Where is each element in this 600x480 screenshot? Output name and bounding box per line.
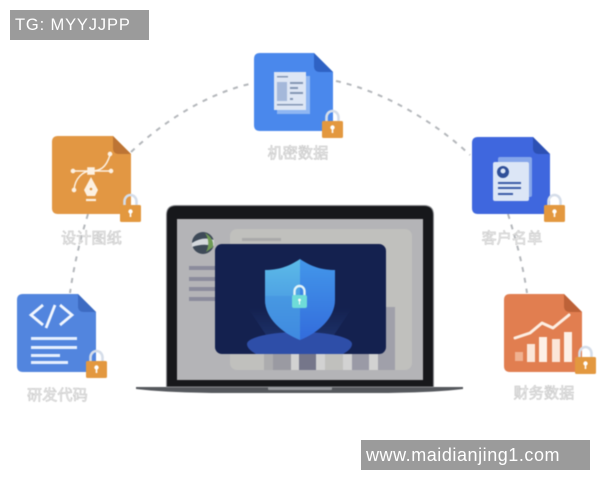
document: design drawings — [52, 136, 141, 222]
laptop — [136, 206, 463, 393]
document: R&D code — [17, 294, 107, 378]
platform — [247, 332, 352, 354]
watermark: website — [361, 440, 590, 470]
laptop base — [136, 387, 463, 393]
label: confidential data: 机密数据 — [268, 145, 328, 162]
sidebar lines — [189, 266, 219, 301]
shield — [265, 259, 335, 340]
text lines — [31, 337, 77, 364]
watermark: website: www.maidianjing1.com — [366, 445, 560, 465]
icon: pen tool — [71, 152, 113, 200]
security panel — [215, 244, 386, 354]
label: design drawings: 设计图纸 — [61, 230, 122, 247]
icon: lock — [86, 351, 107, 378]
label: financial data: 财务数据 — [514, 385, 574, 402]
icon: code brackets — [31, 305, 72, 328]
shield lock — [292, 286, 307, 308]
label: client list: 客户名单 — [482, 230, 542, 247]
icon: lock — [575, 347, 596, 374]
icon: lock — [322, 111, 343, 138]
document: confidential data — [254, 53, 343, 138]
label: R&D code: 研发代码 — [27, 387, 88, 404]
globe logo — [192, 232, 214, 254]
bar chart behind panel — [264, 307, 395, 370]
laptop lid — [166, 206, 434, 387]
icon: lock — [120, 195, 141, 222]
icon: growth chart — [515, 315, 572, 362]
watermark: TG handle: TG: MYYJJPP — [15, 16, 131, 34]
laptop screen — [177, 219, 423, 380]
icon: papers — [274, 72, 310, 114]
background window — [230, 229, 412, 370]
document: client list — [472, 137, 565, 222]
watermark: TG handle — [10, 10, 149, 40]
dashed connection arc — [70, 81, 527, 293]
icon: contact card — [493, 157, 532, 201]
document: financial data — [504, 294, 596, 374]
icon: lock — [544, 195, 565, 222]
